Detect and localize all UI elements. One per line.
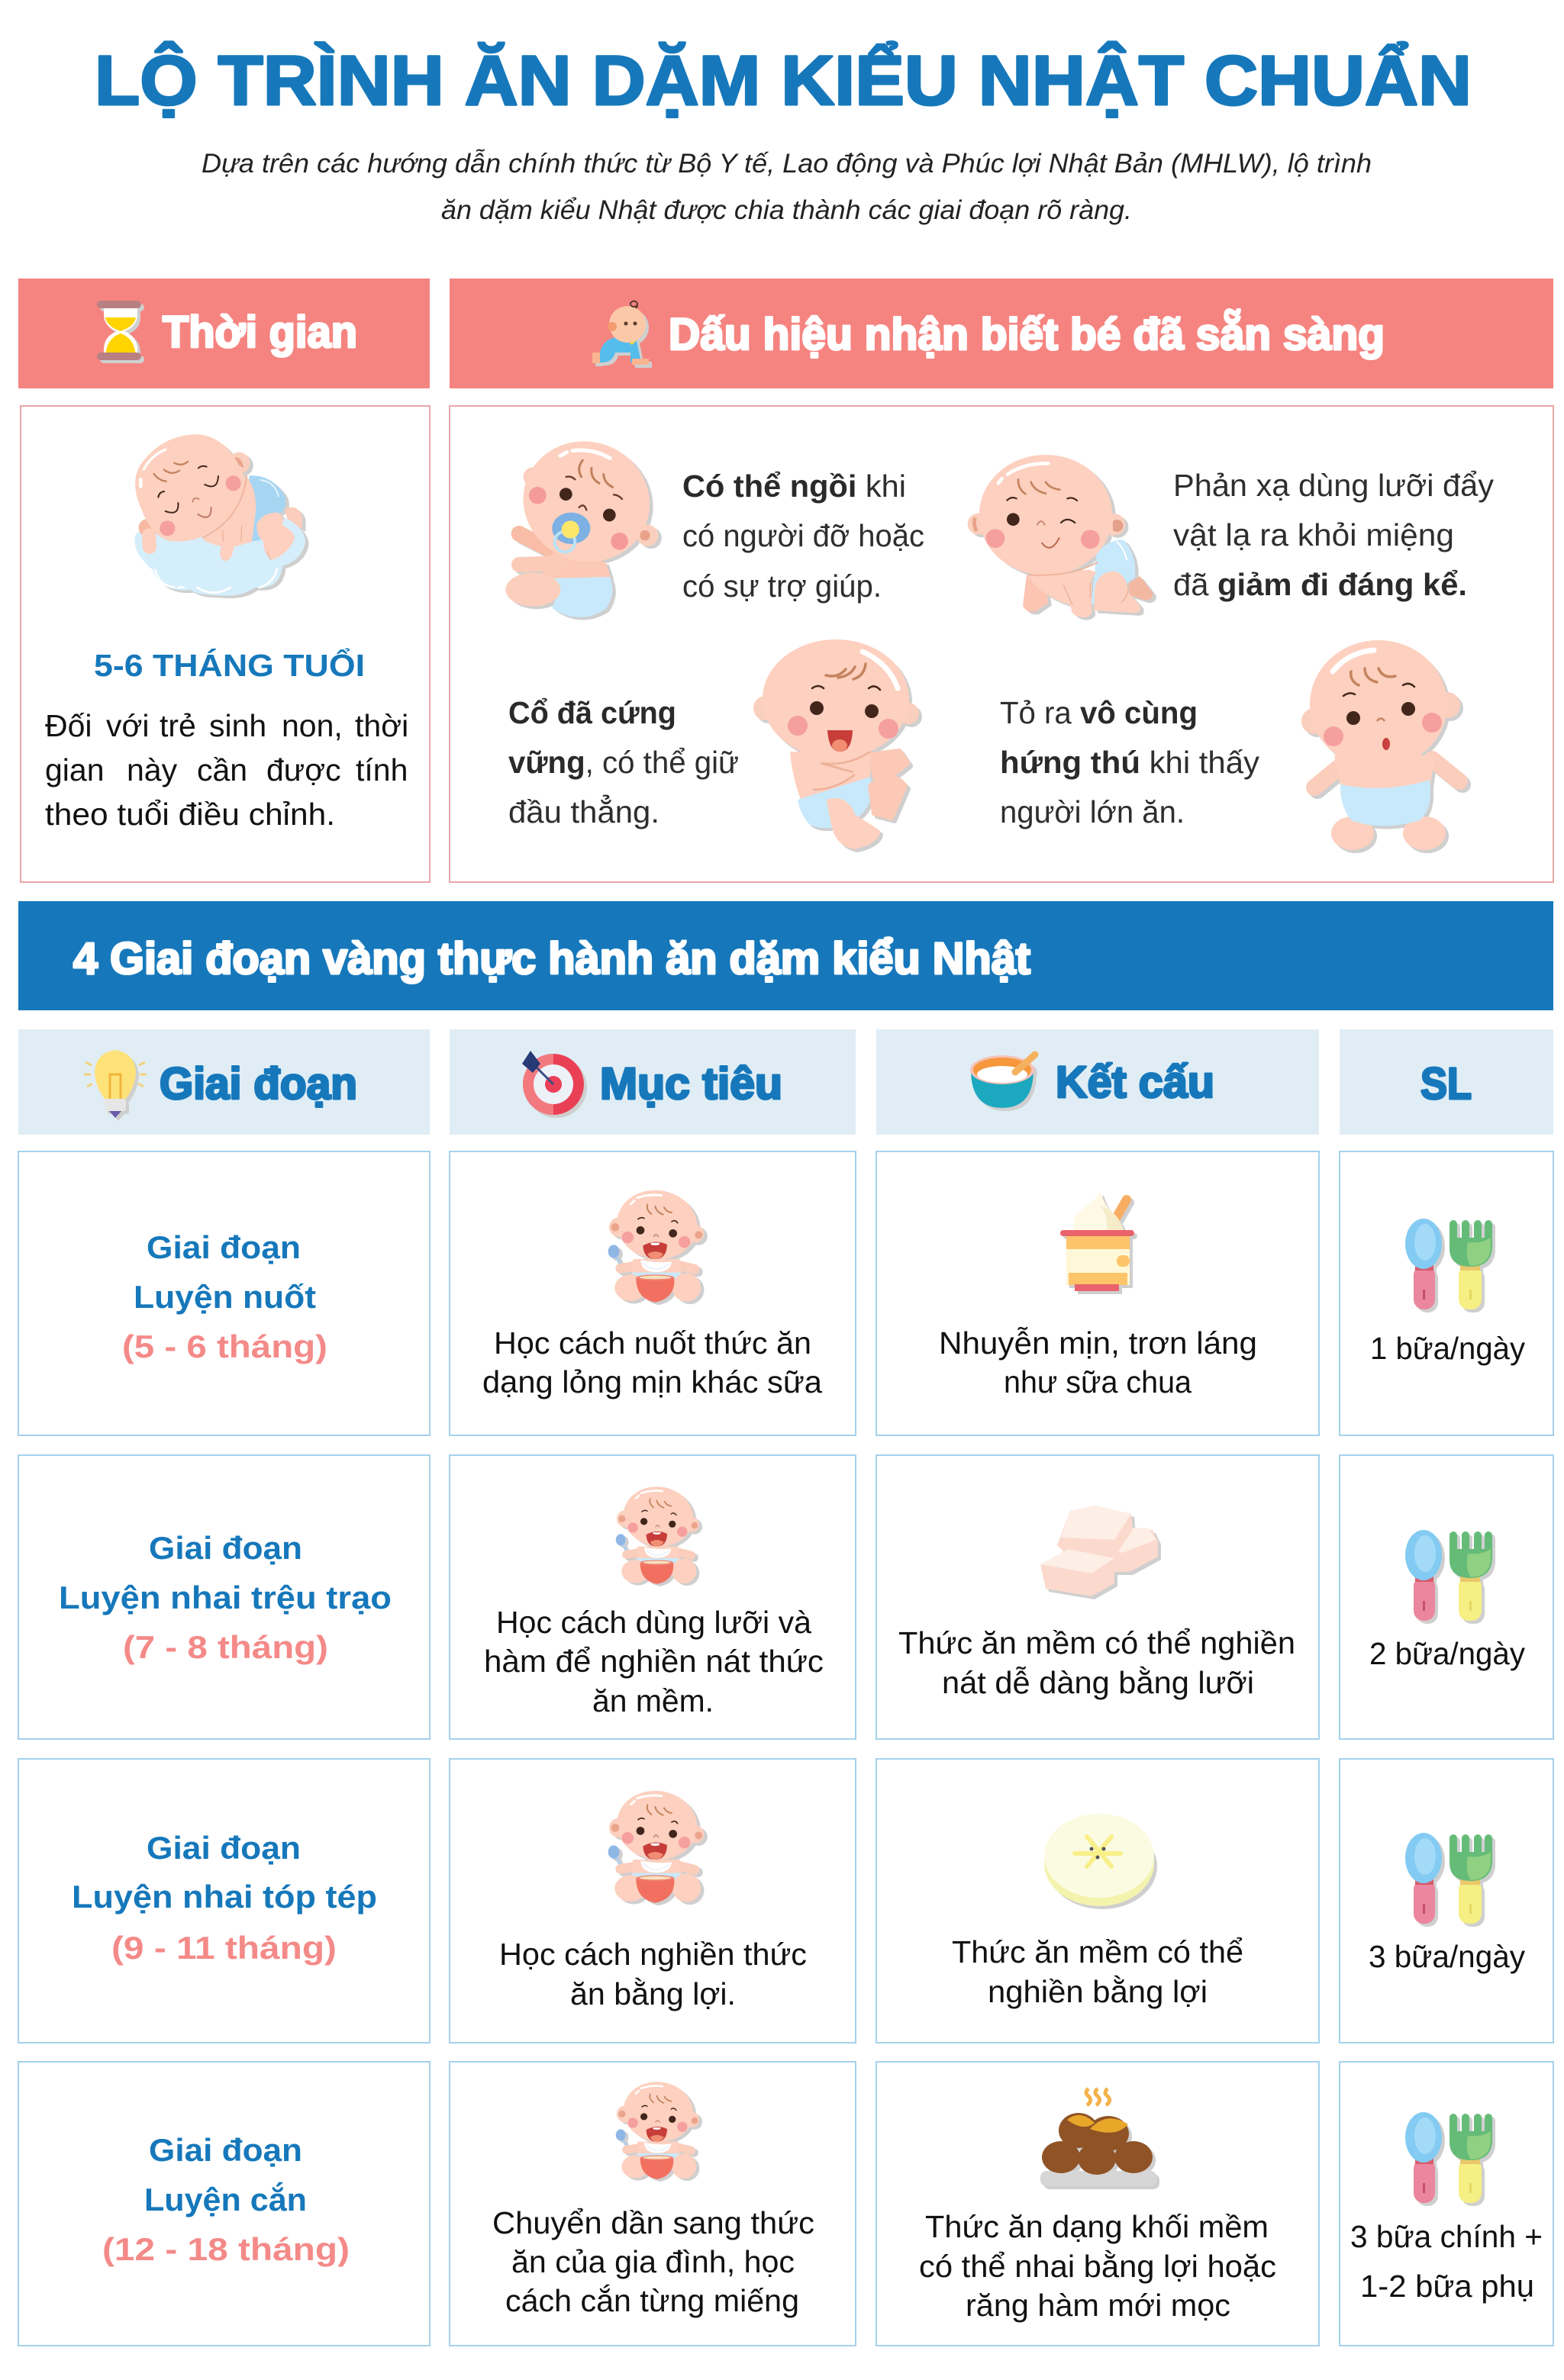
cell: goal 1: dạng lỏng mịn khác sữa	[482, 1364, 822, 1399]
text: premature note: non,	[282, 708, 343, 743]
icon: sleeping baby on cloud	[134, 434, 305, 596]
icon: hourglass	[97, 301, 141, 360]
row 3	[18, 1759, 1553, 2043]
icon: tofu	[1040, 1506, 1158, 1596]
column header: Kết cấu: Kết cấu	[1056, 1058, 1214, 1107]
text: premature note: được	[266, 752, 341, 787]
panel: time: 5-6 THÁNG TUỔI	[94, 647, 365, 683]
cell: stage 4: Giai đoạn	[149, 2132, 302, 2168]
cell: goal 4: cách cắn từng miếng	[505, 2283, 799, 2318]
text: premature note: với	[106, 708, 150, 743]
cell: amount 3	[1340, 1759, 1553, 2043]
icon: banana slice	[1044, 1814, 1154, 1906]
text: premature note: sinh	[209, 708, 266, 743]
cell: texture 3: Thức ăn mềm có thể	[952, 1934, 1243, 1969]
subtitle: ăn dặm kiểu Nhật được chia thành các giai đoạn rõ ràng.	[441, 195, 1132, 225]
cell: stage 2: Luyện nhai trệu trạo	[59, 1580, 392, 1615]
row 1	[18, 1151, 1553, 1435]
cell: goal 3: Học cách nghiền thức	[499, 1937, 807, 1972]
cell: stage 1: Luyện nuốt	[134, 1279, 316, 1315]
cell: amount 4: 1-2 bữa phụ	[1360, 2269, 1534, 2304]
cell: texture 1: như sữa chua	[1004, 1364, 1192, 1399]
icon: crawling baby	[592, 306, 649, 365]
icon: baby eating	[608, 1185, 704, 1303]
cell: texture 2: nát dễ dàng bằng lưỡi	[942, 1665, 1254, 1700]
text: sign 3: vững, có thể giữ	[508, 745, 739, 780]
icon: target with dart	[522, 1051, 584, 1115]
cell: goal 4: Chuyển dần sang thức	[492, 2205, 814, 2240]
cell: amount 2: 2 bữa/ngày	[1369, 1636, 1525, 1671]
icon: spoon and fork	[1405, 2112, 1492, 2203]
cell: stage 2	[18, 1455, 430, 1739]
text: sign 4: hứng thú khi thấy	[1000, 745, 1259, 780]
cell: goal 2: hàm để nghiền nát thức	[484, 1644, 824, 1679]
cell: amount 4	[1340, 2062, 1553, 2346]
text: sign 3: Cổ đã cứng	[508, 695, 676, 730]
icon: surprised baby	[1301, 640, 1460, 850]
cell: goal 3	[450, 1759, 856, 2043]
subtitle: Dựa trên các hướng dẫn chính thức từ Bộ Y tế, Lao động và Phúc lợi Nhật Bản (MHLW), lộ trình	[202, 149, 1372, 179]
cell: stage 2: Giai đoạn	[149, 1530, 302, 1566]
icon: spoon and fork	[1405, 1530, 1492, 1621]
cell: stage 1	[18, 1151, 430, 1435]
cell: goal 2	[450, 1455, 856, 1739]
cell: texture 2	[876, 1455, 1319, 1739]
row 4	[18, 2062, 1553, 2346]
row 2	[18, 1455, 1553, 1739]
cell: texture 3	[876, 1759, 1319, 2043]
header: Thời gian	[18, 279, 430, 388]
cell: stage 1: Giai đoạn	[147, 1229, 301, 1265]
cell: stage 4	[18, 2062, 430, 2346]
cell: amount 1: 1 bữa/ngày	[1370, 1331, 1525, 1366]
cell: goal 2: ăn mềm.	[592, 1683, 714, 1718]
cell: amount 3: 3 bữa/ngày	[1369, 1939, 1525, 1974]
column header: Giai đoạn: Giai đoạn	[160, 1059, 357, 1109]
cell: texture 3: nghiền bằng lợi	[988, 1974, 1208, 2009]
banner: 4 golden stages: 4 Giai đoạn vàng thực hành ăn dặm kiểu Nhật	[73, 934, 1030, 984]
icon: crawling winking baby	[968, 455, 1153, 617]
text: sign 4: người lớn ăn.	[1000, 794, 1185, 829]
cell: stage 4: Luyện cắn	[144, 2181, 307, 2217]
cell: stage 1: (5 - 6 tháng)	[122, 1328, 327, 1364]
icon: steaming food plate	[1040, 2089, 1156, 2186]
text: sign 3: đầu thẳng.	[508, 794, 659, 829]
text: sign 1: có người đỡ hoặc	[682, 518, 924, 553]
text: sign 1: có sự trợ giúp.	[682, 568, 882, 604]
column header: SL	[1340, 1029, 1553, 1135]
icon: spoon and fork	[1405, 1219, 1492, 1309]
text: premature note: gian	[45, 752, 105, 787]
cell: stage 4: (12 - 18 tháng)	[102, 2231, 350, 2267]
cell: texture 4: có thể nhai bằng lợi hoặc	[919, 2249, 1276, 2284]
text: sign 3	[508, 695, 739, 829]
column header: Mục tiêu	[450, 1029, 856, 1135]
header: Dấu hiệu nhận biết bé đã sẵn sàng	[450, 279, 1553, 388]
text: premature note: này	[127, 752, 178, 787]
cell: stage 3: Giai đoạn	[147, 1830, 301, 1866]
cell: texture 4: Thức ăn dạng khối mềm	[925, 2209, 1269, 2244]
text: sign 1: Có thể ngồi khi	[682, 469, 906, 504]
banner: 4 golden stages	[18, 901, 1553, 1010]
cell: texture 1: Nhuyễn mịn, trơn láng	[939, 1325, 1257, 1361]
text: sign 2: đã giảm đi đáng kể.	[1173, 567, 1467, 602]
cell: goal 2: Học cách dùng lưỡi và	[496, 1605, 811, 1640]
text: premature note	[45, 708, 408, 832]
cell: texture 4: răng hàm mới mọc	[966, 2288, 1230, 2323]
text: sign 4	[1000, 695, 1259, 829]
panel: time	[21, 406, 430, 882]
cell: goal 3: ăn bằng lợi.	[570, 1976, 736, 2011]
cell: texture 1	[876, 1151, 1319, 1435]
icon: yogurt cup	[1060, 1192, 1134, 1291]
icon: baby eating	[616, 1482, 699, 1584]
text: sign 4: Tỏ ra vô cùng	[1000, 695, 1198, 730]
icon: laughing baby	[753, 639, 919, 847]
cell: stage 2: (7 - 8 tháng)	[123, 1629, 328, 1665]
icon: light bulb	[95, 1050, 136, 1118]
cell: goal 4: ăn của gia đình, học	[511, 2244, 795, 2279]
header: Thời gian: Thời gian	[163, 308, 357, 357]
cell: texture 2: Thức ăn mềm có thể nghiền	[898, 1625, 1295, 1660]
subtitle	[202, 149, 1372, 225]
column header: Kết cấu	[876, 1029, 1319, 1135]
text: sign 1	[682, 469, 924, 604]
cell: stage 3: Luyện nhai tóp tép	[72, 1879, 377, 1915]
text: premature note: cần	[197, 752, 247, 787]
text: premature note: trẻ	[160, 708, 196, 743]
text: sign 2: Phản xạ dùng lưỡi đẩy	[1173, 468, 1495, 503]
title: LỘ TRÌNH ĂN DẶM KIỂU NHẬT CHUẨN	[95, 40, 1472, 120]
icon: bowl	[970, 1055, 1035, 1108]
cell: goal 1	[450, 1151, 856, 1435]
header: Dấu hiệu nhận biết bé đã sẵn sàng: Dấu hiệu nhận biết bé đã sẵn sàng	[669, 310, 1385, 359]
text: sign 2	[1173, 468, 1495, 602]
cell: stage 3: (9 - 11 tháng)	[111, 1930, 337, 1966]
column header: Giai đoạn	[18, 1029, 430, 1135]
text: premature note: theo tuổi điều chỉnh.	[45, 797, 335, 832]
text: sign 2: vật lạ ra khỏi miệng	[1173, 517, 1454, 552]
cell: texture 4	[876, 2062, 1319, 2346]
cell: amount 1	[1340, 1151, 1553, 1435]
icon: baby eating	[608, 1786, 704, 1903]
cell: stage 3	[18, 1759, 430, 2043]
icon: baby with pacifier	[505, 424, 666, 617]
cell: goal 4	[450, 2062, 856, 2346]
text: premature note: thời	[355, 708, 408, 743]
panel: readiness signs	[450, 406, 1553, 882]
icon: baby eating	[616, 2077, 699, 2179]
text: premature note: Đối	[45, 708, 92, 743]
cell: goal 1: Học cách nuốt thức ăn	[494, 1325, 811, 1361]
cell: amount 4: 3 bữa chính +	[1350, 2219, 1543, 2254]
column header: SL: SL	[1420, 1059, 1472, 1109]
cell: amount 2	[1340, 1455, 1553, 1739]
icon: spoon and fork	[1405, 1833, 1492, 1924]
text: premature note: tính	[356, 752, 408, 787]
column header: Mục tiêu: Mục tiêu	[600, 1059, 782, 1109]
